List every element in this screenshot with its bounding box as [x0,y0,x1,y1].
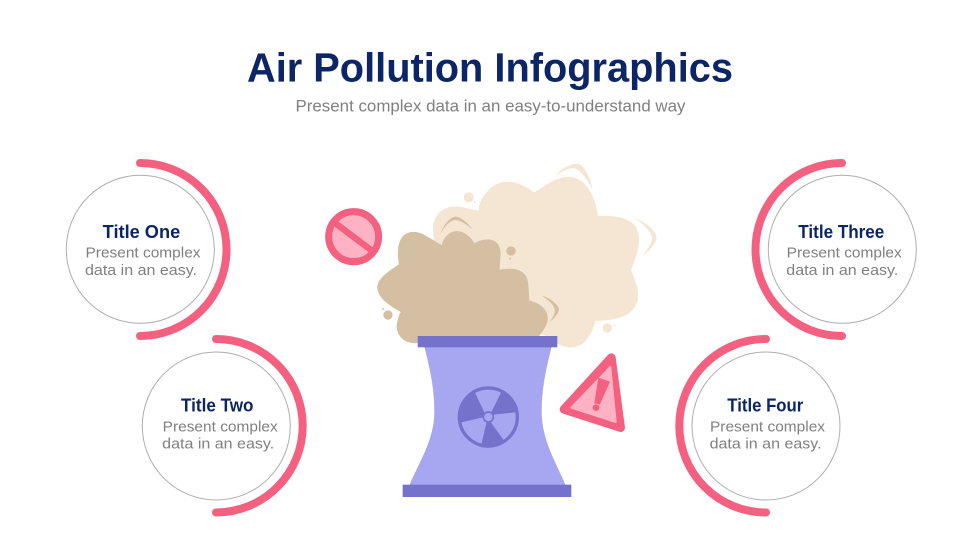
smoke particles [382,192,616,333]
light smoke wisps [555,164,657,256]
heading: title three: Title Three [798,222,884,242]
icon: warning triangle [564,358,621,428]
tower body [409,347,566,485]
text: title three body: data in an easy. [786,263,898,279]
circle: title three [768,175,916,323]
arc: title two [216,339,303,512]
panel: title two [142,339,303,512]
circle: title two [142,352,290,500]
icon: smoke clouds [378,164,657,346]
icon: prohibition sign [329,212,379,262]
subtitle: Present complex data in an easy-to-understand way [296,98,686,116]
circle: title four [692,352,840,500]
heading: title two: Title Two [181,395,254,415]
text: title one body: data in an easy. [85,263,197,279]
arc: title four [679,339,766,512]
text: title three body [786,246,902,279]
heading: title one: Title One [103,222,180,242]
light smoke cloud [434,178,638,346]
icon: cooling tower [403,336,571,497]
text: title two body [162,419,278,453]
text: title four body: Present complex [710,419,826,435]
circle: title one [66,175,214,323]
arc: title one [140,163,226,336]
panel: title three [756,163,916,336]
tower base [403,485,571,497]
text: title one body [85,246,201,279]
panel: title one [66,163,226,336]
heading: title four: Title Four [727,395,803,415]
text: title two body: data in an easy. [162,437,274,453]
text: title three body: Present complex [787,246,902,262]
dark smoke cloud [378,217,559,342]
panel: title four [679,339,840,512]
icon: radiation symbol [458,388,519,448]
text: title two body: Present complex [163,419,278,435]
tower top rim [418,336,557,347]
text: title four body [710,419,826,453]
arc: title three [756,163,842,336]
title: Air Pollution Infographics [247,45,733,91]
text: title four body: data in an easy. [710,437,822,453]
text: title one body: Present complex [86,246,201,262]
